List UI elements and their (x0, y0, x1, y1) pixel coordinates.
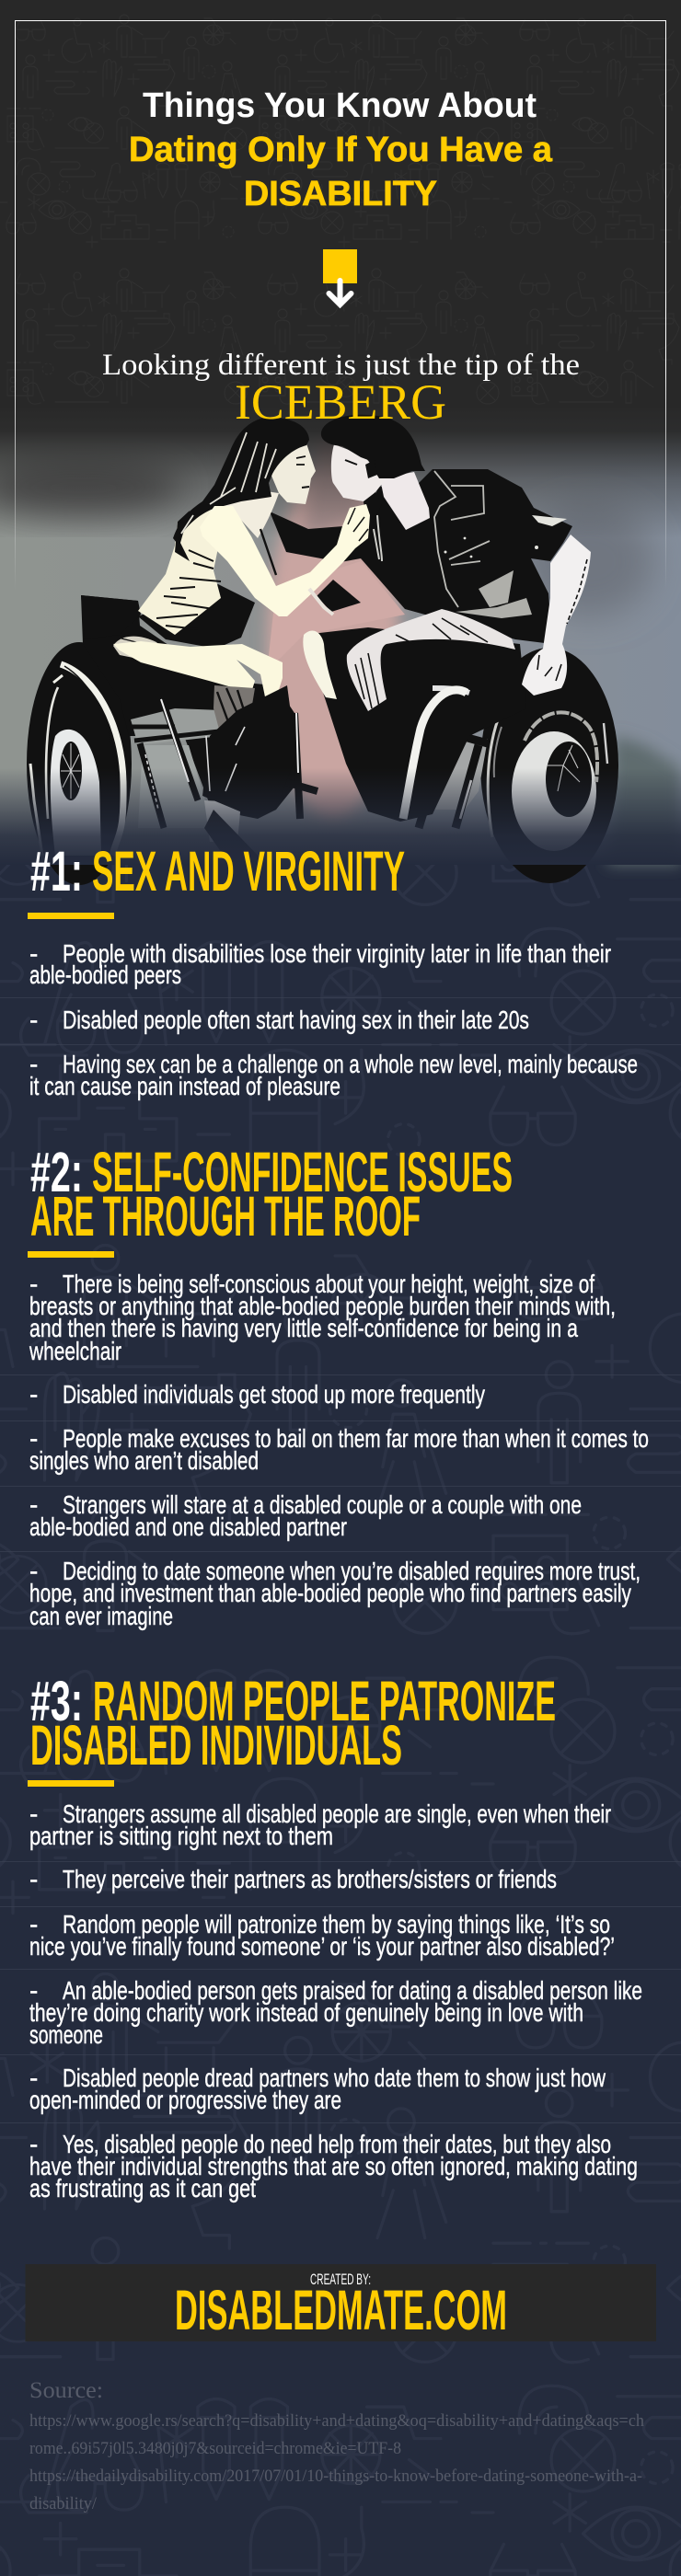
source links: disability/ (29, 2494, 98, 2513)
list: section 2 points: able-bodied and one disabled partner (29, 1512, 347, 1541)
heading: section 3: #3: (30, 1670, 83, 1732)
heading: section 2: #2: (30, 1141, 83, 1203)
title: Things You Know About (143, 86, 537, 125)
list: section 1 points: - (29, 1006, 38, 1034)
title (129, 86, 553, 213)
title: DISABILITY (244, 175, 437, 213)
footer: created by banner (26, 2264, 656, 2341)
man: right arm and hand (522, 535, 591, 696)
list: section 3 points: - (29, 1910, 38, 1938)
list: section 3 points: as frustrating as it can get (29, 2174, 256, 2202)
source links: https://www.google.rs/search?q=disability+and+dating&oq=disability+and+dating&aqs=ch (29, 2411, 644, 2431)
icon: left wheelchair (27, 595, 317, 885)
heading: section 1: #1: (30, 840, 83, 903)
list: section 1 points: Disabled people often start having sex in their late 20s (63, 1006, 529, 1034)
panel: section 1 sex and virginity (0, 840, 681, 1100)
icon: yellow block with down arrow (323, 249, 357, 305)
accent bar (28, 1251, 114, 1258)
list: section 3 points: - (29, 1865, 38, 1893)
woman: seat back, body and legs (81, 507, 296, 817)
list: section 3 points: - (29, 1800, 38, 1828)
heading: section 3: DISABLED INDIVIDUALS (30, 1714, 402, 1777)
heading: section 1 (30, 840, 405, 903)
photo: couple in wheelchairs mural (0, 405, 681, 885)
list: section 3 points: open-minded or progressive they are (29, 2086, 341, 2114)
title: Dating Only If You Have a (129, 131, 553, 169)
subtitle (102, 349, 580, 430)
list: section 3 points: - (29, 2130, 38, 2158)
accent bar (28, 1780, 114, 1787)
heading: section 3 (30, 1670, 556, 1777)
list: section 2 points: - (29, 1380, 38, 1409)
woman: hair and face (173, 418, 316, 543)
source links: https://thedailydisability.com/2017/07/01/10-things-to-know-before-dating-someone-with-a- (29, 2467, 642, 2486)
list: section 2 points: can ever imagine (29, 1602, 173, 1630)
man: legs and jacket (270, 469, 572, 822)
list: section 2 points: - (29, 1557, 38, 1585)
heading: section 2 (30, 1141, 513, 1248)
list: section 2 points: wheelchair (29, 1337, 121, 1365)
list: section 3 points: - (29, 1976, 38, 2005)
list: section 1 points (29, 939, 638, 1100)
list: section 3 points: partner is sitting right next to them (29, 1822, 333, 1850)
subtitle: ICEBERG (235, 374, 446, 430)
source links: Source: (29, 2378, 103, 2403)
list: section 1 points: it can cause pain instead of pleasure (29, 1072, 340, 1100)
list: section 3 points: - (29, 2064, 38, 2092)
dark top background (0, 0, 681, 515)
list: section 2 points (29, 1270, 649, 1630)
list: section 1 points: - (29, 939, 38, 968)
list: section 3 points: someone (29, 2020, 103, 2049)
list: section 2 points: - (29, 1490, 38, 1519)
frame border (15, 20, 666, 591)
panel: section 3 patronizing (0, 1670, 681, 2202)
panel: section 2 self-confidence (0, 1141, 681, 1630)
footer: created by banner: CREATED BY: (310, 2271, 371, 2288)
list: section 3 points (29, 1800, 642, 2202)
list: section 1 points: able-bodied peers (29, 960, 181, 989)
list: section 2 points: singles who aren’t disabled (29, 1446, 259, 1475)
subtitle: Looking different is just the tip of the (102, 349, 580, 382)
source links: rome..69i57j0l5.3480j0j7&sourceid=chrome&ie=UTF-8 (29, 2439, 401, 2458)
woman: arm reaching to the man's face (200, 504, 370, 616)
list: section 2 points: - (29, 1270, 38, 1298)
source links (29, 2378, 644, 2513)
icon: right wheelchair (419, 648, 618, 883)
list: section 1 points: - (29, 1050, 38, 1078)
man: head (321, 415, 430, 530)
heading: section 1: SEX AND VIRGINITY (92, 840, 405, 903)
list: section 2 points: - (29, 1424, 38, 1453)
list: section 2 points: Disabled individuals get stood up more frequently (63, 1380, 485, 1409)
accent bar (28, 913, 114, 919)
